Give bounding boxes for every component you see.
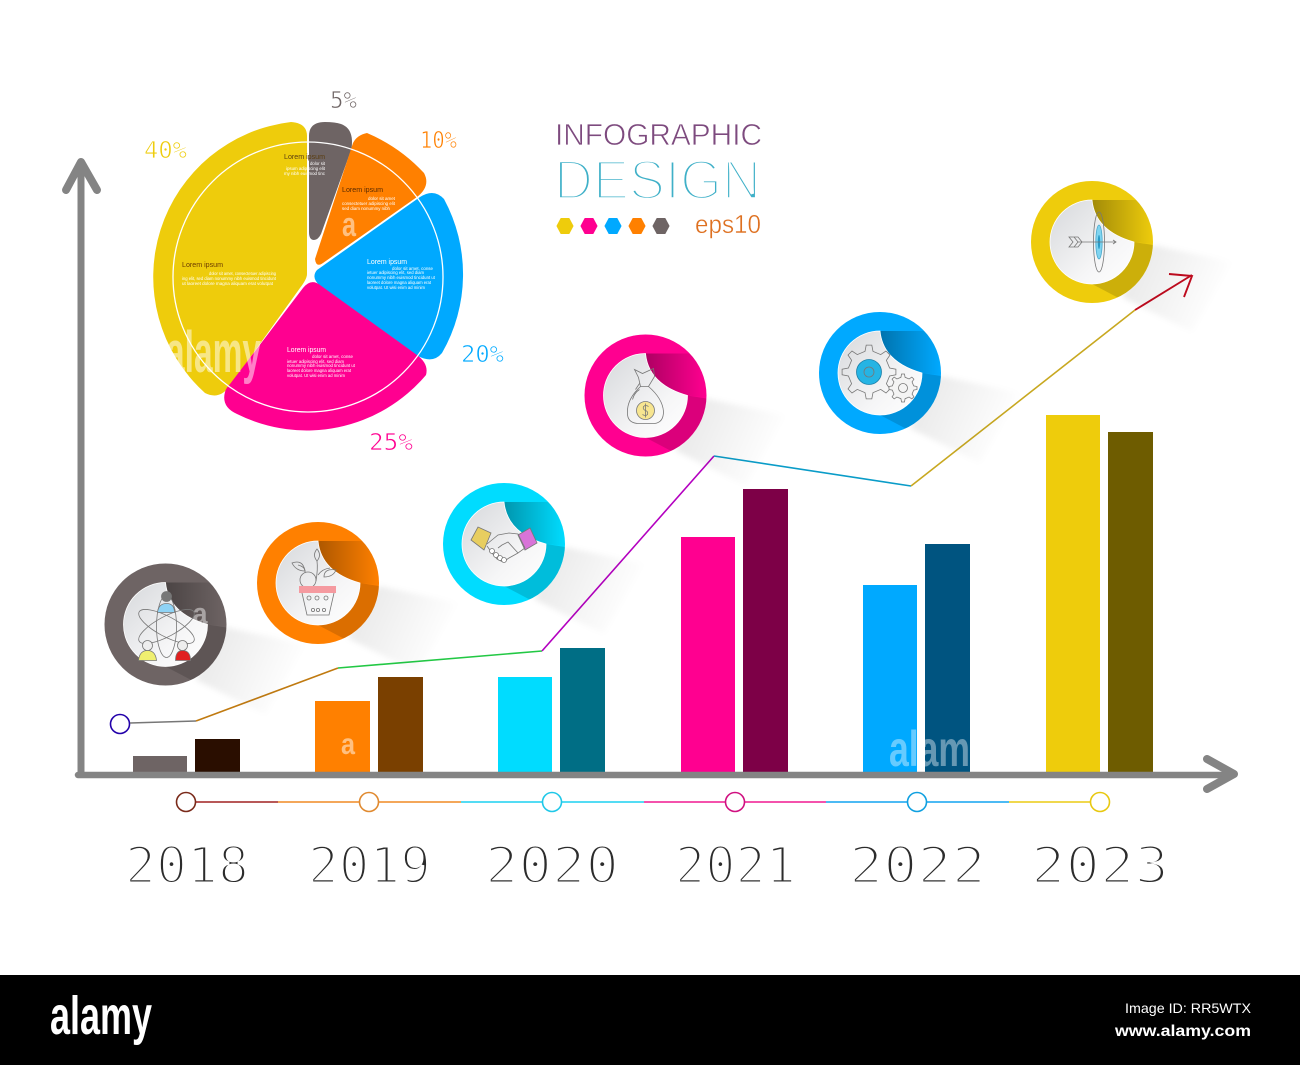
label: yellow slice text: ing elit, sed diam nonummy nibh euismod tincidunt xyxy=(182,276,277,281)
bars 2018 xyxy=(133,739,240,772)
label: eps10: eps10 xyxy=(695,209,761,239)
bars 2019 xyxy=(315,677,423,772)
x axis arrow head xyxy=(1207,759,1234,789)
watermark letter on badge: a xyxy=(192,598,208,630)
badge: handshake xyxy=(443,483,609,618)
label: blue slice text: Lorem ipsum xyxy=(367,257,407,266)
year 2020: 2020 xyxy=(485,837,619,896)
bar chart xyxy=(133,415,1153,777)
year 2022: 2022 xyxy=(849,837,986,896)
label: blue slice text: dolor sit amet, conse xyxy=(392,266,433,271)
year 2019: 2019 xyxy=(308,837,431,896)
label: pink slice text: laoreet dolore magna aliquam erat xyxy=(287,368,352,373)
footer bar xyxy=(0,975,1300,1065)
label: gray slice text: my nibh euismod tinc xyxy=(284,171,326,176)
label: blue slice text: laoreet dolore magna aliquam erat xyxy=(367,280,432,285)
year labels xyxy=(125,837,1169,896)
year 2018: 2018 xyxy=(125,837,249,896)
label: pink slice text: nonummy nibh euismod tincidunt ut xyxy=(287,363,356,368)
label: pink slice text: dolor sit amet, conse xyxy=(312,354,353,359)
badge: team atom xyxy=(104,564,270,699)
badge: money bag xyxy=(584,334,750,470)
marker 2021 xyxy=(726,792,744,812)
icon: plant pot xyxy=(292,549,336,615)
label: 25%: 25% xyxy=(369,430,413,456)
label: gray slice text: Lorem ipsum xyxy=(284,152,325,161)
label: 20%: 20% xyxy=(461,342,504,368)
label: yellow slice text: Lorem ipsum xyxy=(182,260,223,269)
x axis arrow xyxy=(78,772,1230,778)
watermark letter on orange slice: a xyxy=(342,206,357,244)
label: pink slice text: Lorem ipsum xyxy=(287,345,326,354)
slice: 10% orange xyxy=(315,133,426,265)
marker 2018 xyxy=(176,792,196,812)
footer logo: alamy xyxy=(50,986,152,1046)
badge: money plant xyxy=(257,522,423,658)
bars 2022 xyxy=(863,544,970,772)
icon: money bag xyxy=(627,368,664,424)
label: blue slice text: nonummy nibh euismod tincidunt ut xyxy=(367,275,436,280)
slice: 5% gray xyxy=(309,122,352,240)
label: 5%: 5% xyxy=(330,88,357,114)
label: yellow slice text: dolor sit amet, consectetuer adipiscing xyxy=(209,271,276,276)
label: pink slice text: ietuer adipiscing elit, sed diam xyxy=(287,359,344,364)
marker 2019 xyxy=(360,792,378,812)
pie chart xyxy=(153,122,463,430)
label: 10%: 10% xyxy=(420,128,457,154)
icon: people atom xyxy=(134,592,199,660)
pie outline ring xyxy=(173,142,443,412)
icon: gears xyxy=(842,345,917,402)
watermark letter on orange bar: a xyxy=(341,728,355,761)
long shadow xyxy=(348,586,458,673)
hexagon colour legend xyxy=(557,218,669,234)
slice: 20% blue xyxy=(314,193,463,359)
marker 2020 xyxy=(542,792,562,812)
timeline xyxy=(176,792,1110,812)
slice: 40% yellow xyxy=(153,122,307,395)
label: blue slice text: volutpat. Ut wisi enim ad minim xyxy=(367,285,425,290)
long shadow xyxy=(910,376,1020,463)
long shadow xyxy=(676,398,786,486)
bars 2023 xyxy=(1046,415,1153,772)
label: gray slice text: ipsum adipiscing elit xyxy=(286,166,326,171)
slice: 25% pink xyxy=(224,282,427,430)
y axis arrow xyxy=(78,170,84,775)
icon: handshake xyxy=(471,527,537,562)
label: yellow slice text: ut laoreet dolore magna aliquam erat volutpat xyxy=(182,281,274,286)
label: orange slice text xyxy=(342,185,396,211)
label: blue slice text xyxy=(367,257,436,290)
title block xyxy=(554,117,762,239)
title: infographic: INFOGRAPHIC xyxy=(555,117,762,152)
watermark on bars: alam xyxy=(889,721,970,777)
marker 2023 xyxy=(1090,792,1110,812)
label: blue slice text: ietuer adipiscing elit, sed diam xyxy=(367,270,424,275)
label: orange slice text: dolor sit amet xyxy=(368,196,396,201)
year 2023: 2023 xyxy=(1031,837,1169,896)
label: 40%: 40% xyxy=(144,138,187,164)
title: design: DESIGN xyxy=(554,148,761,211)
label: orange slice text: sed diam nonummy nibh xyxy=(342,206,390,211)
watermark on pie: alamy xyxy=(166,320,261,385)
bars 2021 xyxy=(681,489,788,772)
label: gray slice text: dolor sit xyxy=(310,161,326,166)
label: orange slice text: Lorem ipsum xyxy=(342,185,383,194)
long shadow xyxy=(196,628,306,714)
percent labels xyxy=(144,88,504,456)
year 2021: 2021 xyxy=(675,837,796,896)
axes xyxy=(66,162,1234,789)
image id: Image ID: RR5WTX xyxy=(1125,1000,1252,1016)
icon: arrow in target xyxy=(1069,212,1116,272)
long shadow xyxy=(1122,245,1232,332)
y axis arrow head xyxy=(66,162,97,190)
website: www.alamy.com xyxy=(1114,1023,1251,1040)
label: gray slice text xyxy=(284,152,326,176)
trend line xyxy=(110,274,1192,734)
badge: gears xyxy=(819,312,985,447)
long shadow xyxy=(534,547,644,634)
label: yellow slice text xyxy=(182,260,277,286)
marker 2022 xyxy=(908,792,926,812)
bars 2020 xyxy=(498,648,605,772)
label: pink slice text: volutpat. Ut wisi enim ad minim xyxy=(287,373,345,378)
label: orange slice text: consectetuer adipiscing elit xyxy=(342,201,396,206)
label: pink slice text xyxy=(287,345,356,378)
badge: target xyxy=(1031,181,1197,316)
